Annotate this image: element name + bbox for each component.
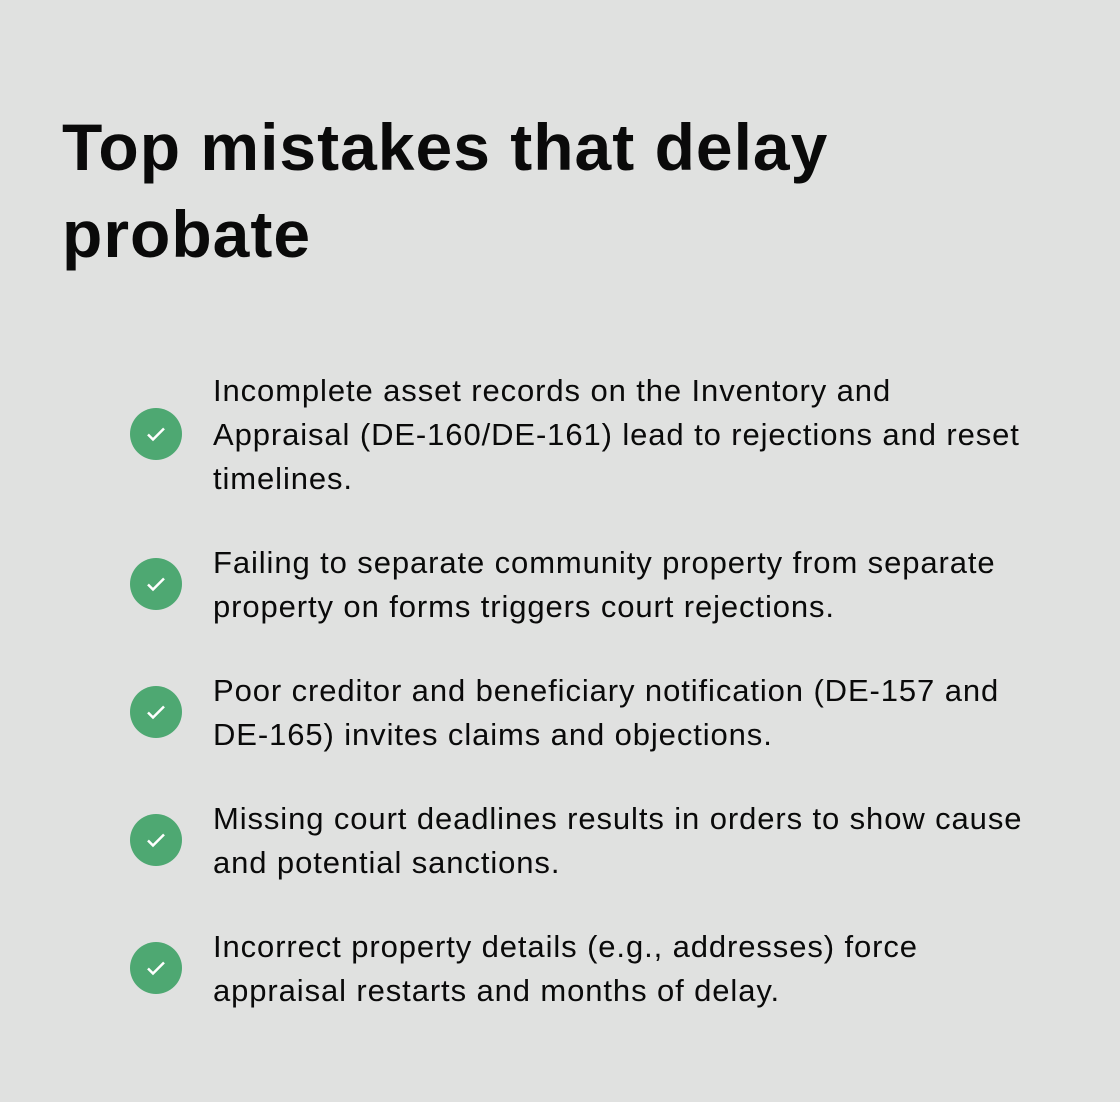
title: probate	[62, 197, 311, 271]
text	[213, 801, 1022, 880]
text: timelines.	[213, 461, 353, 496]
text: and potential sanctions.	[213, 845, 560, 880]
text	[213, 673, 999, 752]
item 3	[130, 673, 999, 752]
title	[62, 110, 828, 271]
text: DE-165) invites claims and objections.	[213, 717, 773, 752]
icon: check	[130, 686, 182, 738]
text: property on forms triggers court rejections.	[213, 589, 835, 624]
title: Top mistakes that delay	[62, 110, 828, 184]
item 5	[130, 929, 918, 1008]
item 4	[130, 801, 1022, 880]
icon: check	[130, 814, 182, 866]
icon: check	[130, 408, 182, 460]
text: Incomplete asset records on the Inventory and	[213, 373, 891, 408]
icon: check	[130, 558, 182, 610]
icon: check	[130, 942, 182, 994]
text: Missing court deadlines results in orders to show cause	[213, 801, 1022, 836]
item 2	[130, 545, 996, 624]
text: Failing to separate community property from separate	[213, 545, 996, 580]
text: Appraisal (DE-160/DE-161) lead to rejections and reset	[213, 417, 1020, 452]
text	[213, 545, 996, 624]
text: appraisal restarts and months of delay.	[213, 973, 780, 1008]
text	[213, 929, 918, 1008]
text: Poor creditor and beneficiary notification (DE-157 and	[213, 673, 999, 708]
text	[213, 373, 1020, 496]
item 1	[130, 373, 1020, 496]
text: Incorrect property details (e.g., addresses) force	[213, 929, 918, 964]
